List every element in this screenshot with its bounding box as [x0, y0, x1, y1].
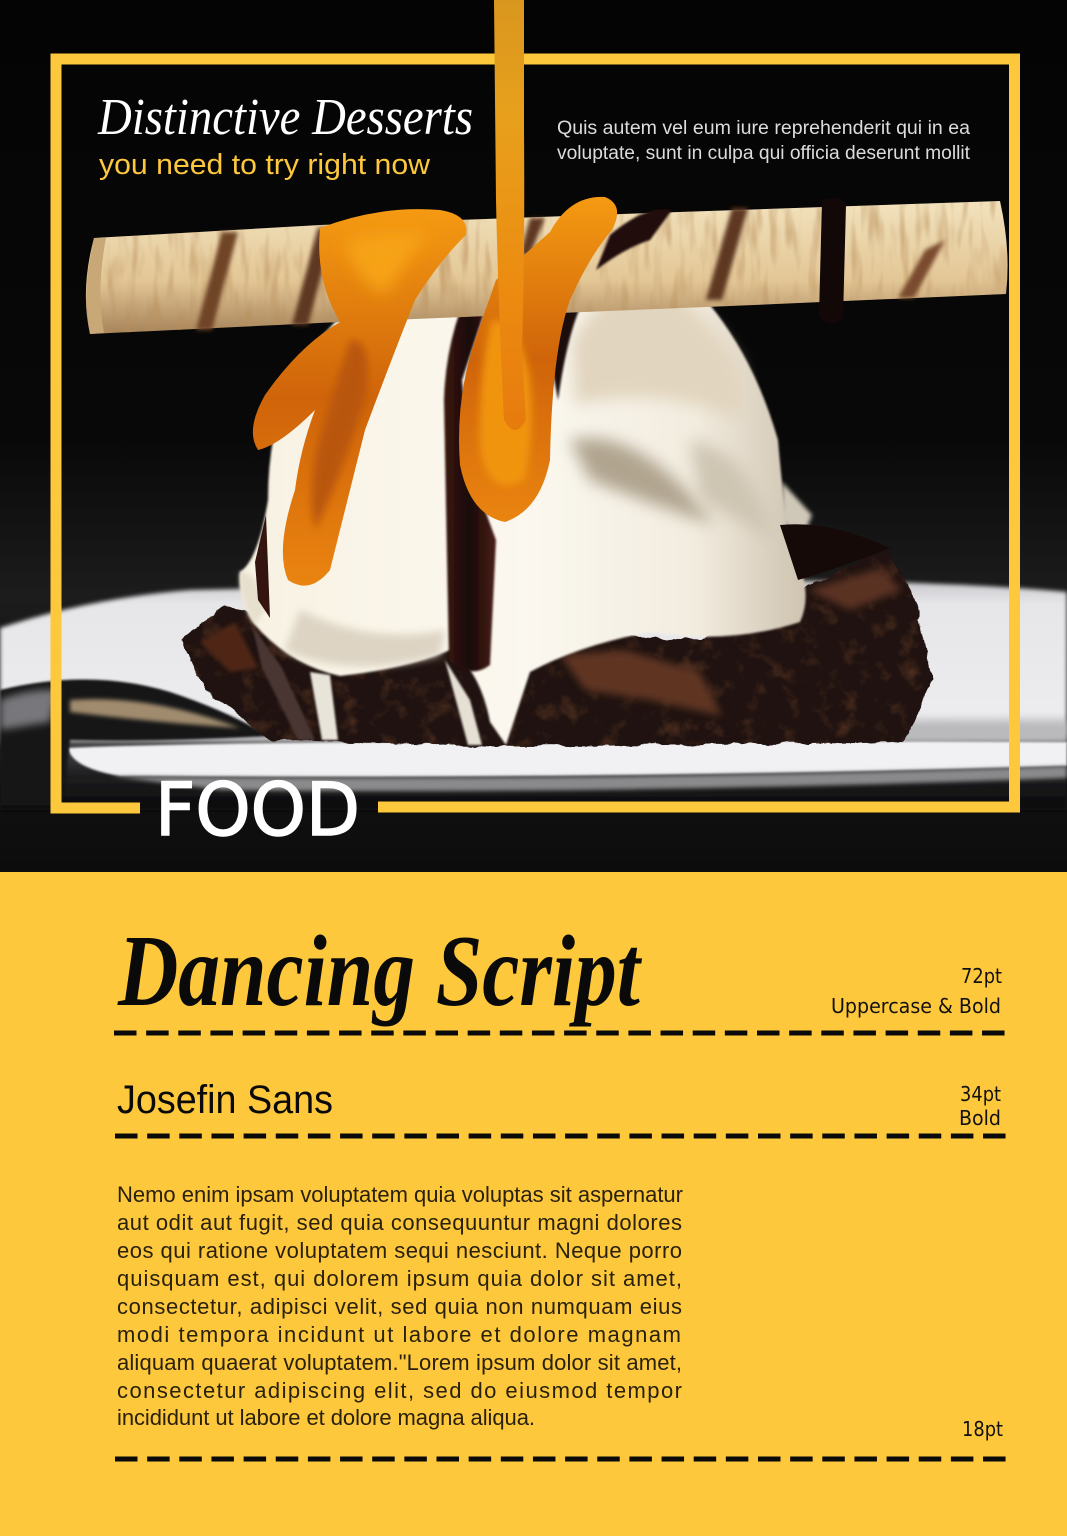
size note: 34pt: Bold — [959, 1106, 1001, 1130]
brownie — [182, 548, 932, 746]
body paragraph: incididunt ut labore et dolore magna aliqua. — [117, 1405, 535, 1430]
title: Distinctive Desserts: Distinctive Desserts — [97, 89, 473, 146]
yellow frame — [56, 59, 1014, 808]
plate — [0, 580, 1067, 810]
size note: 18pt: 18pt — [962, 1417, 1003, 1441]
body paragraph — [117, 1182, 683, 1430]
heading: Josefin Sans: Josefin Sans — [117, 1078, 333, 1122]
body paragraph: aliquam quaerat voluptatem."Lorem ipsum dolor sit amet, — [117, 1350, 682, 1375]
body paragraph: aut odit aut fugit, sed quia consequuntur magni dolores — [117, 1210, 682, 1235]
size note: 34pt — [959, 1082, 1001, 1130]
body paragraph: Nemo enim ipsam voluptatem quia voluptas sit aspernatur — [117, 1182, 683, 1207]
body paragraph: consectetur adipiscing elit, sed do eiusmod tempor — [117, 1378, 682, 1403]
size note: 72pt: Uppercase & Bold — [831, 994, 1001, 1018]
chocolate behind caramel — [596, 209, 672, 270]
body paragraph: eos qui ratione voluptatem sequi nesciunt. Neque porro — [117, 1238, 682, 1263]
intro text: voluptate, sunt in culpa qui officia deserunt mollit — [557, 143, 971, 164]
body paragraph: consectetur, adipisci velit, sed quia non numquam eius — [117, 1294, 682, 1319]
caramel stream — [494, 0, 526, 430]
size note: 72pt — [831, 964, 1002, 1018]
subtitle: you need to try right now — [99, 149, 431, 181]
category label: FOOD: FOOD — [155, 768, 360, 853]
spoon — [0, 679, 268, 806]
body paragraph: quisquam est, qui dolorem ipsum quia dolor sit amet, — [117, 1266, 682, 1291]
intro text: Quis autem vel eum iure reprehenderit qui in ea — [557, 118, 970, 139]
size note: 72pt: 72pt — [961, 964, 1002, 988]
ice cream scoop — [240, 275, 812, 745]
wafer roll — [86, 198, 1008, 334]
body paragraph: modi tempora incidunt ut labore et dolore magnam — [117, 1322, 681, 1347]
chocolate on wafer — [819, 198, 846, 324]
size note: 34pt: 34pt — [960, 1082, 1001, 1106]
heading: Dancing Script: Dancing Script — [117, 915, 642, 1028]
photo: dessert on plate — [0, 0, 1067, 872]
intro text — [557, 118, 971, 164]
panel: type specimen — [0, 872, 1067, 1536]
chocolate drips — [252, 240, 890, 745]
caramel drips — [253, 197, 617, 586]
